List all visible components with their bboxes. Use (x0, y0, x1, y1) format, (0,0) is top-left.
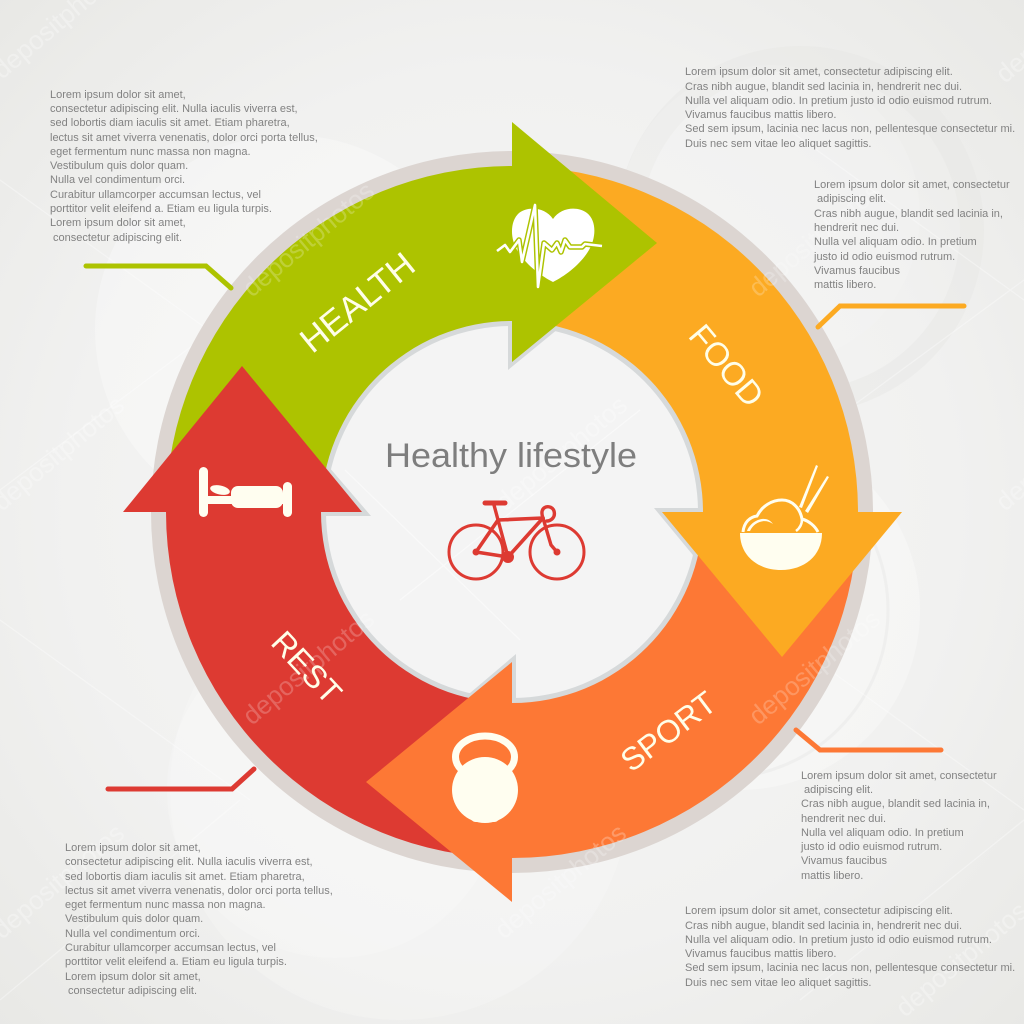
text block: top right (685, 66, 1015, 150)
text block: top left: consectetur adipiscing elit. Nulla iaculis viverra est, (50, 103, 298, 115)
text block: sport: mattis libero. (801, 870, 863, 882)
text block: top right: Nulla vel aliquam odio. In pretium justo id odio euismod rutrum. (685, 95, 992, 107)
segment: food stem (512, 166, 858, 512)
text block: sport: Lorem ipsum dolor sit amet, consectetur (801, 770, 997, 782)
icon: rice bowl (740, 465, 829, 570)
text block: food: Vivamus faucibus (814, 265, 901, 277)
leader line: rest (108, 769, 254, 789)
text block: sport (800, 770, 997, 882)
icon: kettlebell (452, 736, 518, 823)
text block: top right: Cras nibh augue, blandit sed lacinia in, hendrerit nec dui. (685, 81, 962, 93)
text block: food: adipiscing elit. (817, 193, 886, 205)
watermarks over ring: depositphotos (743, 176, 886, 303)
text block: bottom left: consectetur adipiscing elit. (68, 985, 197, 997)
text block: food (813, 179, 1010, 291)
text block: food: justo id odio euismod rutrum. (813, 251, 955, 263)
text block: top left: Lorem ipsum dolor sit amet, (50, 217, 186, 229)
icon: bed (199, 467, 292, 517)
ring segments (166, 166, 858, 858)
text block: top right: Duis nec sem vitae leo aliquet sagittis. (685, 138, 871, 150)
text block: bottom left: lectus sit amet viverra venenatis, dolor orci porta tellus, (65, 885, 333, 897)
text block: top left: Lorem ipsum dolor sit amet, (50, 89, 186, 101)
text block: top left: Nulla vel condimentum orci. (50, 174, 185, 186)
text block: bottom left: consectetur adipiscing elit. Nulla iaculis viverra est, (65, 856, 313, 868)
text block: bottom left: Lorem ipsum dolor sit amet, (65, 842, 201, 854)
title: Healthy lifestyle (385, 437, 637, 475)
text block: sport: Vivamus faucibus (801, 855, 888, 867)
text block: top right: Vivamus faucibus mattis libero. (685, 109, 836, 121)
text block: top left (50, 89, 318, 244)
text block: bottom right: Duis nec sem vitae leo aliquet sagittis. (685, 977, 871, 989)
icon: bicycle (449, 503, 584, 579)
text block: top left: consectetur adipiscing elit. (53, 232, 182, 244)
segment: sport stem (512, 512, 858, 858)
text block: food: Cras nibh augue, blandit sed lacinia in, (814, 208, 1003, 220)
text block: bottom left: Curabitur ullamcorper accumsan lectus, vel (65, 942, 276, 954)
icon: heart with pulse (497, 205, 602, 287)
leader line: food (818, 306, 964, 327)
watermarks over ring: depositphotos (490, 390, 633, 517)
text block: bottom left: eget fermentum nunc massa non magna. (65, 899, 266, 911)
text block: top left: porttitor velit eleifend a. Etiam eu ligula turpis. (50, 203, 272, 215)
text block: sport: hendrerit nec dui. (801, 813, 886, 825)
text block: top left: eget fermentum nunc massa non magna. (50, 146, 251, 158)
text block: bottom left: Vestibulum quis dolor quam. (65, 913, 203, 925)
text block: sport: justo id odio euismod rutrum. (800, 841, 942, 853)
watermarks over ring: depositphotos (489, 818, 632, 945)
label: sport: SPORT (614, 684, 723, 779)
text block: food: Nulla vel aliquam odio. In pretium (814, 236, 977, 248)
arrow head: health (512, 122, 657, 362)
text block: bottom left (65, 842, 333, 997)
outer taupe ring (151, 151, 873, 873)
text block: bottom right: Sed sem ipsum, lacinia nec lacus non, pellentesque consectetur mi. (685, 962, 1015, 974)
text block: bottom right: Vivamus faucibus mattis libero. (685, 948, 836, 960)
text block: food: mattis libero. (814, 279, 876, 291)
text block: bottom right (685, 905, 1015, 989)
text block: sport: Cras nibh augue, blandit sed lacinia in, (801, 798, 990, 810)
text block: top left: sed lobortis diam iaculis sit amet. Etiam pharetra, (50, 117, 290, 129)
watermarks over ring: depositphotos (237, 604, 380, 731)
arrow head: sport (366, 662, 512, 902)
watermarks over ring: depositphotos (743, 604, 886, 731)
segment: rest stem (166, 512, 512, 858)
text block: bottom left: Nulla vel condimentum orci. (65, 928, 200, 940)
text block: top left: Vestibulum quis dolor quam. (50, 160, 188, 172)
watermarks over ring (237, 176, 886, 945)
text block: top left: Curabitur ullamcorper accumsan lectus, vel (50, 189, 261, 201)
text block: top right: Sed sem ipsum, lacinia nec lacus non, pellentesque consectetur mi. (685, 123, 1015, 135)
leader line: health (86, 266, 231, 288)
label: rest: REST (264, 624, 349, 711)
text block: bottom left: sed lobortis diam iaculis sit amet. Etiam pharetra, (65, 871, 305, 883)
text block: food: hendrerit nec dui. (814, 222, 899, 234)
inner grey ring and centre disc (321, 321, 703, 703)
text block: top right: Lorem ipsum dolor sit amet, consectetur adipiscing elit. (685, 66, 953, 78)
text block: sport: Nulla vel aliquam odio. In pretium (801, 827, 964, 839)
text block: bottom left: Lorem ipsum dolor sit amet, (65, 971, 201, 983)
watermark centre lines (345, 410, 640, 640)
arrow head: food (662, 512, 902, 657)
label: food: FOOD (682, 317, 771, 414)
text block: top left: lectus sit amet viverra venenatis, dolor orci porta tellus, (50, 132, 318, 144)
leader line: sport (796, 730, 941, 750)
text block: bottom right: Lorem ipsum dolor sit amet, consectetur adipiscing elit. (685, 905, 953, 917)
segment: health stem (166, 166, 512, 512)
text block: bottom right: Cras nibh augue, blandit sed lacinia in, hendrerit nec dui. (685, 920, 962, 932)
text block: bottom right: Nulla vel aliquam odio. In pretium justo id odio euismod rutrum. (685, 934, 992, 946)
text block: bottom left: porttitor velit eleifend a. Etiam eu ligula turpis. (65, 956, 287, 968)
label: health: HEALTH (293, 245, 423, 361)
text block: sport: adipiscing elit. (804, 784, 873, 796)
watermarks over ring: depositphotos (237, 176, 380, 303)
arrow head: rest (123, 366, 362, 512)
text block: food: Lorem ipsum dolor sit amet, consectetur (814, 179, 1010, 191)
